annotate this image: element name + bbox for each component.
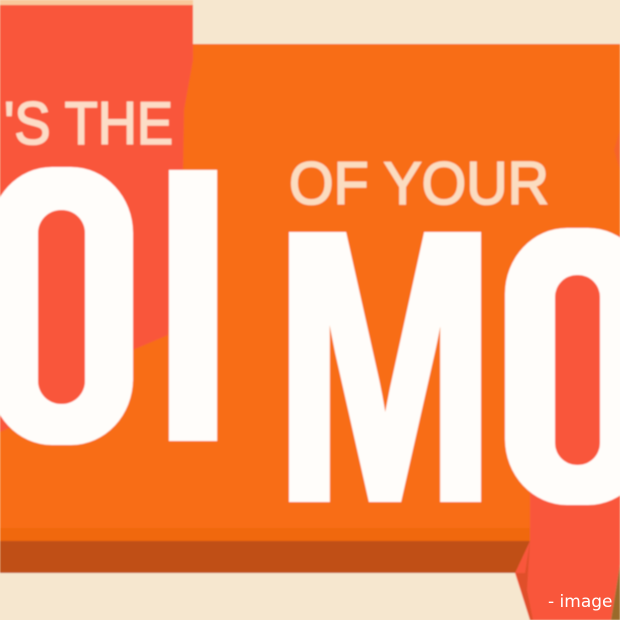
brown corner	[611, 565, 620, 620]
letter O left: O	[2, 147, 121, 470]
caption: - image	[548, 592, 612, 612]
letter I: I	[146, 85, 240, 525]
big letters: OI	[0, 85, 240, 525]
letter M: M	[275, 156, 495, 578]
red sliver top right	[614, 130, 620, 170]
big letters: MO	[275, 156, 620, 578]
heading: it's the: 'S THE	[4, 90, 173, 157]
letter O left backing	[0, 167, 133, 445]
panel: red left ribbon	[0, 5, 193, 432]
heading: of your: OF YOUR	[289, 150, 549, 217]
panel: red right ribbon	[515, 235, 620, 620]
counter of left O	[38, 210, 85, 404]
letter O right backing	[505, 228, 620, 505]
counter of right O	[555, 275, 600, 465]
top edge strip	[0, 0, 193, 5]
banner shadow	[0, 541, 530, 573]
ribbon fold sliver	[516, 541, 533, 620]
banner lower shade	[0, 528, 530, 541]
